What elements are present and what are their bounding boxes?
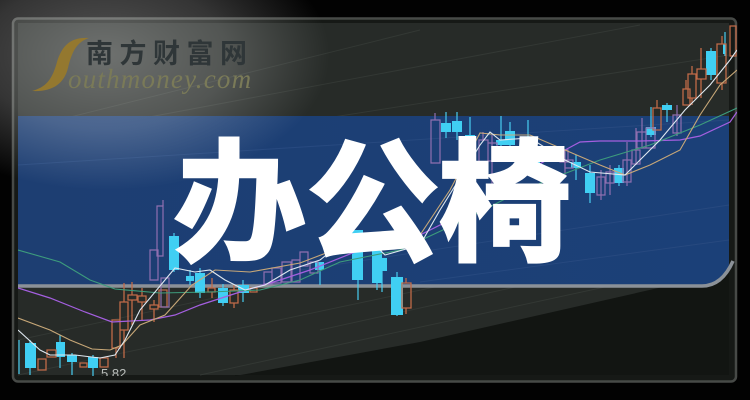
title: 办 — [174, 131, 306, 278]
moving average: purple line — [18, 112, 737, 322]
logo domain: outhmoney.com — [68, 64, 252, 94]
logo Chinese name: 南方财富网 — [86, 38, 254, 69]
moving average: white line — [18, 50, 737, 358]
logo — [32, 38, 254, 94]
purple up candles on blue area — [150, 105, 681, 307]
moving average: tan line — [18, 70, 737, 350]
price label: 5.82 — [101, 366, 126, 381]
top-left light glow — [0, 0, 750, 300]
title — [174, 131, 571, 278]
blue band — [18, 116, 733, 286]
logo swoosh — [32, 38, 89, 91]
title: 公 — [307, 131, 439, 278]
title: 椅 — [439, 131, 571, 278]
moving average: green line — [18, 108, 737, 293]
dark lower wedge — [235, 272, 729, 376]
